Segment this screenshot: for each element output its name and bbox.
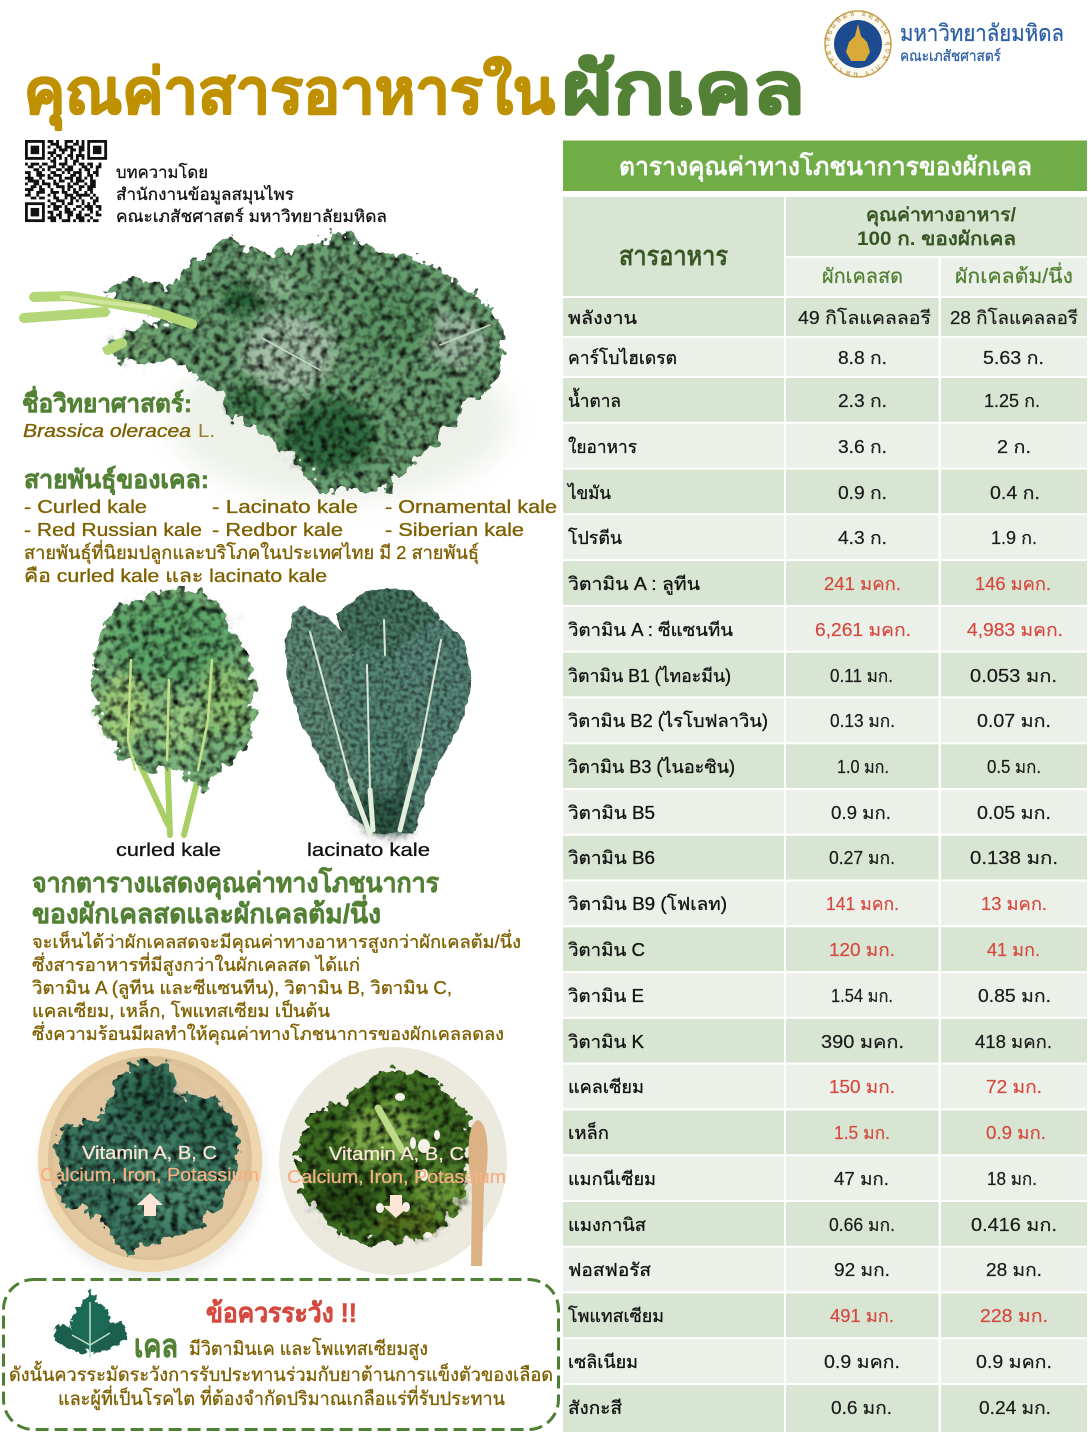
image: lacinato kale: [285, 588, 472, 838]
icon: kale leaf: [54, 1288, 126, 1358]
kale varieties: สายพันธุ์ที่นิยมปลูกและบริโภคในประเทศไทย มี 2 สายพันธุ์: [24, 540, 479, 565]
row: vitamin B9: 141 มคก.: [826, 894, 899, 914]
row: vitamin B9: [563, 882, 1087, 925]
text: comparison body: [32, 929, 521, 1045]
table header: คุณค่าทางอาหาร/: [866, 205, 1017, 227]
row: energy: 49 กิโลแคลลอรี: [798, 307, 931, 328]
row: vitamin B5: วิตามิน B5: [568, 803, 655, 823]
text: article credit: บทความโดย: [116, 163, 208, 182]
heading: comparison: [32, 866, 439, 929]
row: vitamin B2: [563, 698, 1087, 742]
row: fiber: 3.6 ก.: [838, 437, 887, 457]
callout: caution: มีวิตามินเค และโพแทสเซียมสูง: [189, 1337, 428, 1360]
row: vitamin K: 418 มคก.: [975, 1032, 1052, 1052]
row: vitamin B3: 1.0 มก.: [837, 757, 889, 777]
logo: Mahidol University: [824, 10, 1064, 78]
heading: comparison: จากตารางแสดงคุณค่าทางโภชนาการ: [32, 866, 439, 900]
row: potassium: [563, 1293, 1087, 1337]
text: fresh kale nutrients: Calcium, Iron, Potassium: [40, 1164, 259, 1185]
icon: wooden spoon: [468, 1120, 488, 1266]
text: cooked kale nutrients: [287, 1143, 506, 1187]
row: calcium: 150 มก.: [829, 1077, 895, 1097]
row: carbohydrate: คาร์โบไฮเดรต: [568, 347, 677, 368]
row: fat: 0.9 ก.: [838, 483, 887, 503]
kale varieties: สายพันธุ์ของเคล:: [24, 465, 209, 496]
row: vitamin E: วิตามิน E: [568, 986, 644, 1006]
row: energy: [563, 298, 1087, 336]
callout: caution: เคล: [134, 1328, 178, 1364]
text: comparison body: แคลเซียม, เหล็ก, โพแทสเซียม เป็นต้น: [32, 999, 330, 1021]
row: zinc: 0.24 มก.: [979, 1398, 1051, 1418]
row: vitamin B1: 0.11 มก.: [830, 666, 893, 686]
row: potassium: 228 มก.: [980, 1306, 1048, 1326]
row: vitamin C: 41 มก.: [987, 940, 1040, 960]
image: fresh kale bowl: [38, 1048, 264, 1280]
row: vitamin A lutein: วิตามิน A : ลูทีน: [568, 574, 700, 595]
row: vitamin B1: วิตามิน B1 (ไทอะมีน): [568, 665, 731, 686]
QR code: [25, 141, 106, 221]
row: protein: 4.3 ก.: [838, 528, 887, 548]
row: protein: โปรตีน: [568, 527, 622, 548]
kale varieties: - Redbor kale: [212, 519, 343, 540]
row: vitamin B6: วิตามิน B6: [568, 848, 655, 868]
title: [24, 50, 805, 130]
row: phosphorus: [563, 1248, 1087, 1292]
captions: kale types: lacinato kale: [307, 839, 430, 860]
row: vitamin B2: 0.07 มก.: [977, 711, 1051, 731]
image: kale bunch: [24, 232, 510, 500]
row: protein: [563, 515, 1087, 559]
row: potassium: โพแทสเซียม: [568, 1305, 664, 1326]
kale varieties: - Lacinato kale: [212, 496, 358, 517]
kale varieties: - Ornamental kale: [385, 496, 557, 517]
nutrition table: [563, 197, 1087, 1432]
row: vitamin C: วิตามิน C: [568, 940, 645, 960]
row: fiber: 2 ก.: [997, 437, 1031, 457]
row: zinc: สังกะสี: [568, 1398, 622, 1418]
row: phosphorus: 92 มก.: [834, 1260, 890, 1280]
row: vitamin B2: 0.13 มก.: [830, 711, 895, 731]
kale varieties: - Curled kale: [24, 496, 147, 517]
row: vitamin B5: [563, 790, 1087, 834]
row: vitamin B2: วิตามิน B2 (ไรโบฟลาวิน): [568, 710, 768, 731]
row: fat: [563, 470, 1087, 513]
table header: ผักเคลสด: [822, 266, 903, 288]
row: vitamin E: 0.85 มก.: [978, 986, 1051, 1006]
text: comparison body: ซึ่งความร้อนมีผลทำให้คุณค่าทางโภชนาการของผักเคลลดลง: [32, 1021, 504, 1045]
table header: [563, 197, 1087, 296]
scientific name: Brassica oleracea: [23, 421, 191, 441]
kale varieties: [24, 465, 557, 586]
row: vitamin B1: [563, 653, 1087, 696]
row: carbohydrate: 8.8 ก.: [838, 348, 887, 368]
row: calcium: แคลเซียม: [568, 1077, 644, 1097]
row: vitamin B3: [563, 744, 1087, 788]
row: protein: 1.9 ก.: [991, 528, 1037, 548]
row: carbohydrate: [563, 338, 1087, 376]
row: sugar: 1.25 ก.: [984, 391, 1040, 411]
table title bar: ตารางคุณค่าทางโภชนาการของผักเคล: [619, 151, 1032, 183]
row: sugar: [563, 378, 1087, 422]
row: sugar: น้ำตาล: [568, 388, 621, 411]
table header: ผักเคลต้ม/นึ่ง: [955, 262, 1073, 288]
row: vitamin E: [563, 973, 1087, 1017]
logo: Mahidol University: คณะเภสัชศาสตร์: [900, 48, 1001, 65]
kale varieties: - Siberian kale: [385, 519, 524, 540]
title: คุณค่าสารอาหารใน: [24, 56, 555, 130]
text: comparison body: วิตามิน A (ลูทีน และซีแซนทีน), วิตามิน B, วิตามิน C,: [32, 978, 452, 999]
row: energy: พลังงาน: [568, 308, 637, 328]
row: calcium: [563, 1065, 1087, 1108]
row: vitamin B9: วิตามิน B9 (โฟเลท): [568, 893, 727, 914]
text: article credit: คณะเภสัชศาสตร์ มหาวิทยาลัยมหิดล: [116, 207, 387, 226]
row: fat: ไขมัน: [566, 482, 611, 503]
row: manganese: 0.66 มก.: [829, 1215, 895, 1235]
row: fiber: ใยอาหาร: [568, 436, 637, 457]
row: magnesium: 18 มก.: [987, 1169, 1037, 1189]
row: vitamin B9: 13 มคก.: [981, 894, 1047, 914]
row: fiber: [563, 424, 1087, 468]
row: vitamin B6: 0.27 มก.: [829, 848, 895, 868]
row: vitamin A zeaxanthin: [563, 607, 1087, 651]
row: vitamin K: 390 มคก.: [821, 1032, 904, 1052]
arrow: down: [383, 1195, 409, 1218]
row: manganese: 0.416 มก.: [971, 1215, 1057, 1235]
row: fat: 0.4 ก.: [990, 483, 1040, 503]
row: calcium: 72 มก.: [986, 1077, 1042, 1097]
table header: สารอาหาร: [619, 241, 728, 271]
table header: 100 ก. ของผักเคล: [857, 229, 1016, 250]
row: vitamin C: 120 มก.: [829, 940, 895, 960]
row: vitamin B1: 0.053 มก.: [970, 666, 1057, 686]
row: zinc: [563, 1385, 1087, 1432]
heading: comparison: ของผักเคลสดและผักเคลต้ม/นึ่ง: [32, 894, 381, 929]
text: cooked kale nutrients: Calcium, Iron, Potassium: [287, 1166, 506, 1187]
row: selenium: เซลิเนียม: [568, 1352, 638, 1372]
row: vitamin A zeaxanthin: 6,261 มคก.: [815, 620, 911, 640]
callout: caution: ดังนั้นควรระมัดระวังการรับประทานร่วมกับยาต้านการแข็งตัวของเลือด: [9, 1361, 553, 1386]
row: vitamin K: วิตามิน K: [568, 1032, 644, 1052]
row: magnesium: 47 มก.: [834, 1169, 889, 1189]
row: energy: 28 กิโลแคลลอรี: [950, 307, 1078, 328]
scientific name: L.: [198, 421, 215, 441]
row: sugar: 2.3 ก.: [838, 391, 887, 411]
image: cooked kale plate: [279, 1047, 507, 1275]
row: manganese: แมงกานิส: [568, 1215, 646, 1235]
row: vitamin B6: 0.138 มก.: [970, 848, 1058, 868]
row: magnesium: แมกนีเซียม: [568, 1169, 656, 1189]
text: article credit: สำนักงานข้อมูลสมุนไพร: [116, 185, 294, 205]
row: iron: [563, 1110, 1087, 1154]
callout: caution: และผู้ที่เป็นโรคไต ที่ต้องจำกัดปริมาณเกลือแร่ที่รับประทาน: [58, 1385, 505, 1410]
text: comparison body: จะเห็นได้ว่าผักเคลสดจะมีคุณค่าทางอาหารสูงกว่าผักเคลต้ม/นึ่ง: [32, 929, 521, 953]
scientific name: [22, 386, 215, 441]
kale varieties: คือ curled kale และ lacinato kale: [24, 565, 327, 586]
table title bar: [563, 140, 1087, 191]
row: zinc: 0.6 มก.: [831, 1398, 892, 1418]
text: article credit: [116, 163, 387, 226]
row: vitamin B6: [563, 836, 1087, 880]
callout: caution: ข้อควรระวัง !!: [206, 1298, 357, 1328]
captions: kale types: curled kale: [116, 839, 221, 860]
scientific name: ชื่อวิทยาศาสตร์:: [22, 386, 192, 418]
row: potassium: 491 มก.: [830, 1306, 894, 1326]
row: vitamin A lutein: 146 มคก.: [975, 574, 1051, 594]
row: vitamin C: [563, 927, 1087, 971]
text: comparison body: ซึ่งสารอาหารที่มีสูงกว่าในผักเคลสด ได้แก่: [32, 952, 360, 976]
row: phosphorus: 28 มก.: [986, 1260, 1042, 1280]
row: phosphorus: ฟอสฟอรัส: [568, 1260, 651, 1280]
arrow: up: [137, 1193, 163, 1216]
row: vitamin B3: 0.5 มก.: [987, 757, 1041, 777]
row: vitamin A lutein: 241 มคก.: [824, 574, 901, 594]
row: selenium: 0.9 มคก.: [976, 1352, 1052, 1372]
row: vitamin B5: 0.9 มก.: [831, 803, 891, 823]
row: vitamin B5: 0.05 มก.: [977, 803, 1051, 823]
text: fresh kale nutrients: Vitamin A, B, C: [82, 1142, 217, 1163]
logo: Mahidol University: มหาวิทยาลัยมหิดล อตฺตานํ อุปมํ กเร: [824, 12, 890, 76]
captions: kale types: [116, 839, 430, 860]
row: vitamin A lutein: [563, 561, 1087, 605]
text: fresh kale nutrients: [40, 1142, 259, 1185]
row: iron: 0.9 มก.: [986, 1123, 1046, 1143]
row: vitamin K: [563, 1019, 1087, 1063]
row: vitamin E: 1.54 มก.: [831, 986, 893, 1006]
row: manganese: [563, 1202, 1087, 1246]
logo: Mahidol University: มหาวิทยาลัยมหิดล: [900, 20, 1064, 46]
row: vitamin B3: วิตามิน B3 (ไนอะซิน): [568, 756, 735, 777]
row: vitamin A zeaxanthin: 4,983 มคก.: [967, 620, 1063, 640]
kale varieties: - Red Russian kale: [24, 519, 202, 540]
row: selenium: [563, 1339, 1087, 1383]
row: carbohydrate: 5.63 ก.: [983, 348, 1044, 368]
callout: caution: [4, 1280, 558, 1430]
row: vitamin A zeaxanthin: วิตามิน A : ซีแซนทีน: [568, 620, 733, 640]
row: magnesium: [563, 1156, 1087, 1200]
image: curled kale: [92, 590, 255, 835]
row: iron: เหล็ก: [568, 1121, 609, 1143]
text: cooked kale nutrients: Vitamin A, B, C: [329, 1143, 464, 1164]
title: ผักเคล: [562, 50, 805, 129]
row: iron: 1.5 มก.: [834, 1123, 890, 1143]
row: selenium: 0.9 มคก.: [824, 1352, 900, 1372]
